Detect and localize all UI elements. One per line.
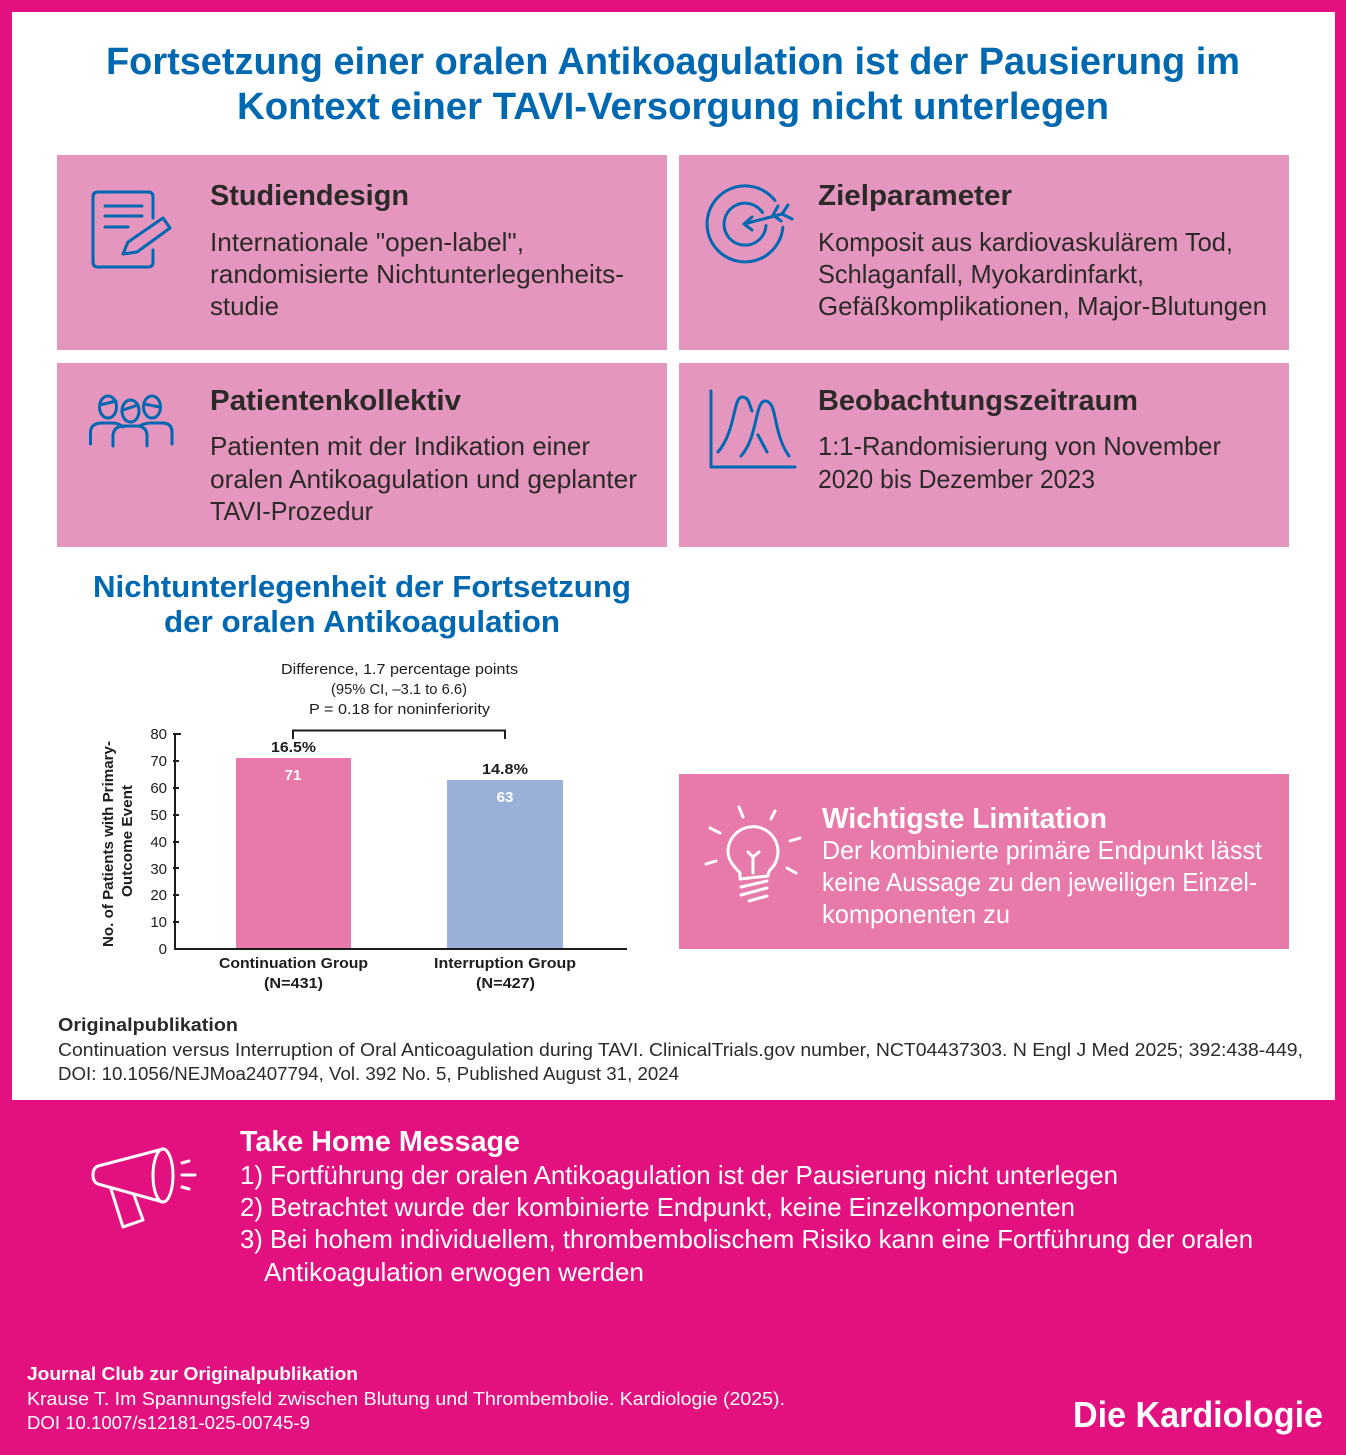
take home message: Take Home Message xyxy=(240,1126,520,1158)
original publication: Continuation versus Interruption of Oral Anticoagulation during TAVI. ClinicalTrials.gov number, NCT04437303. N Engl J Med 2025; 392:438-449, xyxy=(58,1040,1303,1060)
text: limitation: komponenten zu xyxy=(822,899,1010,929)
bar: continuation group: 71 xyxy=(285,767,301,784)
take home items: 2) Betrachtet wurde der kombinierte Endpunkt, keine Einzelkomponenten xyxy=(240,1192,1075,1222)
y axis title: Outcome Event xyxy=(120,785,136,897)
x axis labels: (N=431) xyxy=(264,975,323,992)
x axis labels: Continuation Group xyxy=(219,955,368,972)
text: Studiendesign xyxy=(210,227,624,321)
y axis tick labels: 80 xyxy=(150,726,167,743)
journal club reference: Krause T. Im Spannungsfeld zwischen Blutung und Thrombembolie. Kardiologie (2025). xyxy=(27,1389,785,1409)
axes xyxy=(173,734,627,949)
text: Zielparameter: Schlaganfall, Myokardinfarkt, xyxy=(818,259,1144,289)
y axis tick labels: 10 xyxy=(150,914,167,931)
take home items: 1) Fortführung der oralen Antikoagulation ist der Pausierung nicht unterlegen xyxy=(240,1160,1118,1190)
x axis labels: Interruption Group xyxy=(434,955,576,972)
annotation: difference: P = 0.18 for noninferiority xyxy=(309,701,491,718)
text: Zielparameter xyxy=(818,227,1267,321)
text: Patientenkollektiv: Patienten mit der Indikation einer xyxy=(210,431,590,461)
journal club reference xyxy=(27,1364,785,1433)
y axis title: No. of Patients with Primary- xyxy=(101,741,117,947)
annotation: difference: (95% CI, –3.1 to 6.6) xyxy=(331,681,467,698)
x axis labels: (N=427) xyxy=(476,975,535,992)
annotation: difference: Difference, 1.7 percentage points xyxy=(281,661,518,678)
y axis tick labels: 30 xyxy=(150,861,167,878)
heading: Studiendesign: Studiendesign xyxy=(210,180,409,212)
title xyxy=(106,41,1240,128)
bar chart xyxy=(101,661,627,992)
text: limitation: keine Aussage zu den jeweiligen Einzel- xyxy=(822,867,1257,897)
bracket xyxy=(293,730,505,739)
text: limitation: Der kombinierte primäre Endpunkt lässt xyxy=(822,835,1263,865)
panel: Zielparameter xyxy=(679,155,1289,350)
y axis title xyxy=(101,741,136,947)
icon: target with arrow xyxy=(707,186,792,262)
bar: continuation group xyxy=(236,739,351,949)
original publication: DOI: 10.1056/NEJMoa2407794, Vol. 392 No. 5, Published August 31, 2024 xyxy=(58,1064,679,1084)
text: Studiendesign: Internationale "open-label", xyxy=(210,227,524,257)
text: Beobachtungszeitraum xyxy=(818,431,1221,494)
y axis tick labels: 50 xyxy=(150,807,167,824)
take home message xyxy=(240,1126,1253,1287)
text: Patientenkollektiv: TAVI-Prozedur xyxy=(210,496,373,526)
heading: Beobachtungszeitraum: Beobachtungszeitraum xyxy=(818,385,1138,417)
text: limitation xyxy=(822,835,1263,929)
text: Patientenkollektiv: oralen Antikoagulation und geplanter xyxy=(210,464,637,494)
x axis labels xyxy=(219,955,576,992)
chart heading: Nichtunterlegenheit der Fortsetzung xyxy=(93,569,631,604)
panel: Patientenkollektiv xyxy=(57,363,667,547)
journal name: Die Kardiologie xyxy=(1073,1394,1323,1435)
original publication xyxy=(58,1015,1303,1084)
original publication: Originalpublikation xyxy=(58,1015,238,1035)
y axis tick labels: 0 xyxy=(159,941,167,958)
bar: interruption group: 14.8% xyxy=(482,761,528,778)
title: Kontext einer TAVI-Versorgung nicht unterlegen xyxy=(237,86,1109,128)
icon: document with pencil xyxy=(93,192,170,267)
bar: interruption group xyxy=(447,761,563,949)
bar: interruption group: 63 xyxy=(497,789,513,806)
y axis tick labels: 60 xyxy=(150,780,167,797)
y axis tick labels: 40 xyxy=(150,834,167,851)
y axis tick labels: 70 xyxy=(150,753,167,770)
panel: Beobachtungszeitraum xyxy=(679,363,1289,547)
panel: Studiendesign xyxy=(57,155,667,350)
text: Studiendesign: randomisierte Nichtunterlegenheits- xyxy=(210,259,624,289)
text: Zielparameter: Komposit aus kardiovaskulärem Tod, xyxy=(818,227,1233,257)
chart heading: der oralen Antikoagulation xyxy=(164,604,560,639)
y axis tick labels: 20 xyxy=(150,887,167,904)
icon: light bulb xyxy=(706,807,800,901)
journal club reference: Journal Club zur Originalpublikation xyxy=(27,1364,358,1384)
text: Beobachtungszeitraum: 1:1-Randomisierung von November xyxy=(818,431,1221,461)
title: Fortsetzung einer oralen Antikoagulation ist der Pausierung im xyxy=(106,41,1240,83)
annotation: difference xyxy=(281,661,518,718)
y axis tick labels xyxy=(150,726,167,958)
text: Beobachtungszeitraum: 2020 bis Dezember 2023 xyxy=(818,464,1095,494)
icon: distribution curves xyxy=(711,391,795,467)
icon: megaphone xyxy=(93,1149,195,1227)
journal club reference: DOI 10.1007/s12181-025-00745-9 xyxy=(27,1413,310,1433)
heading: Wichtigste Limitation: Wichtigste Limitation xyxy=(822,803,1107,835)
text: Studiendesign: studie xyxy=(210,291,279,321)
take home items: 3) Bei hohem individuellem, thrombembolischem Risiko kann eine Fortführung der oralen xyxy=(240,1224,1253,1254)
text: Patientenkollektiv xyxy=(210,431,637,526)
heading: Patientenkollektiv: Patientenkollektiv xyxy=(210,385,461,417)
take home items xyxy=(240,1160,1253,1287)
icon: group of people xyxy=(90,396,172,446)
panel: Wichtigste Limitation xyxy=(679,774,1289,949)
heading: Zielparameter: Zielparameter xyxy=(818,180,1012,212)
take home items: Antikoagulation erwogen werden xyxy=(264,1257,644,1287)
bar: continuation group: 16.5% xyxy=(271,739,316,756)
text: Zielparameter: Gefäßkomplikationen, Major-Blutungen xyxy=(818,291,1267,321)
chart heading xyxy=(93,569,631,639)
